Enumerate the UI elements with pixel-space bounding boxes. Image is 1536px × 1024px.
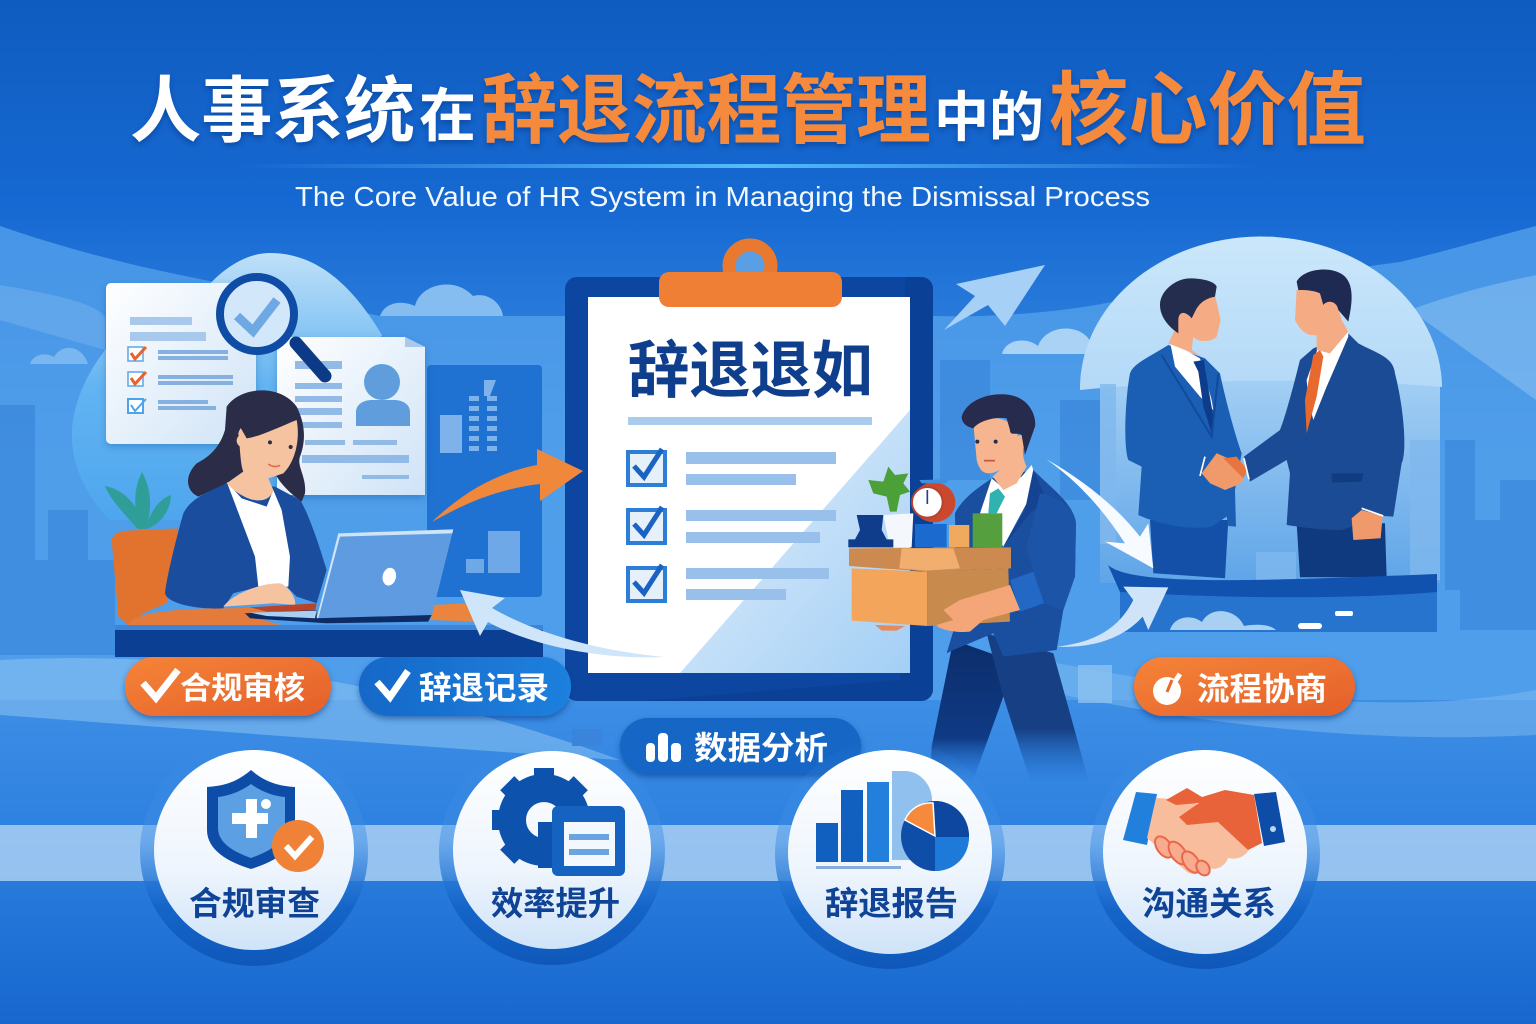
icon: bar and pie chart xyxy=(816,771,969,871)
clip xyxy=(659,245,842,307)
card: dismissal analysis: 辞退报告 xyxy=(825,885,958,922)
jacket xyxy=(947,470,1076,657)
pill: negotiate: 流程协商 xyxy=(1197,671,1327,707)
dome backdrop xyxy=(1080,236,1442,390)
icon: magnifier xyxy=(220,277,325,376)
desk items xyxy=(430,603,477,622)
legs xyxy=(930,640,1003,780)
right skyline detail xyxy=(1100,384,1440,580)
checklist row 2 xyxy=(628,507,836,543)
alarm clock xyxy=(913,482,955,522)
shirt xyxy=(227,482,290,587)
card: relationship: 沟通关系 xyxy=(1142,885,1276,922)
arrows: curves to handshake xyxy=(1047,459,1168,647)
face xyxy=(227,416,298,500)
ribbon band xyxy=(0,825,1536,881)
laptop xyxy=(245,529,453,623)
pill: record xyxy=(359,657,571,716)
platform xyxy=(1108,565,1437,632)
title: 人事系统 xyxy=(130,72,415,152)
small cloud lower right xyxy=(1170,611,1276,630)
hand xyxy=(223,583,295,607)
man carrying box xyxy=(848,394,1088,780)
pill: compliance: 合规审核 xyxy=(180,671,305,706)
two men shaking hands xyxy=(1125,270,1404,578)
title: 在 xyxy=(419,84,476,149)
pill: analysis xyxy=(620,718,861,774)
clouds xyxy=(30,285,1112,364)
arrow: upward curve xyxy=(1057,587,1168,647)
decorative squares xyxy=(572,665,1112,746)
head xyxy=(973,418,1027,490)
title divider xyxy=(240,164,1260,168)
card: relationship xyxy=(1090,739,1320,969)
title: 核心价值 xyxy=(1049,66,1366,155)
title xyxy=(130,66,1366,155)
left man xyxy=(1125,278,1242,578)
pill: negotiate xyxy=(1134,657,1355,716)
panel: skyline behind laptop xyxy=(427,365,542,597)
box contents xyxy=(915,524,947,547)
pill: analysis: 数据分析 xyxy=(694,730,828,766)
checklist row 1 xyxy=(628,449,836,485)
checklist row 3 xyxy=(628,565,829,601)
back hair xyxy=(188,390,305,502)
icon: gear and folder xyxy=(492,768,625,876)
city skyline xyxy=(0,360,1536,655)
pill: compliance xyxy=(125,657,331,716)
card: compliance review xyxy=(140,738,368,966)
icon: shield xyxy=(207,770,324,872)
arm xyxy=(1027,493,1076,610)
card: dismissal analysis xyxy=(775,739,1005,969)
shirt and tie xyxy=(980,465,1033,547)
blazer xyxy=(165,483,327,609)
paper plane xyxy=(944,265,1045,330)
document: profile xyxy=(277,337,425,495)
panel: right skyline backdrop xyxy=(1100,378,1440,583)
box xyxy=(852,568,927,626)
desk xyxy=(115,625,543,657)
title: 中的 xyxy=(934,88,1044,148)
document: checklist xyxy=(106,283,256,444)
clipboard xyxy=(565,245,933,701)
title: 辞退流程管理 xyxy=(482,69,931,154)
pill: record: 辞退记录 xyxy=(419,670,549,706)
arrow: downward curve xyxy=(1047,459,1153,568)
heading: 辞退退如 xyxy=(628,337,873,406)
card: compliance review: 合规审查 xyxy=(189,885,320,922)
plant xyxy=(868,467,910,512)
left backdrop blob xyxy=(72,253,382,520)
plant xyxy=(105,472,171,529)
icon: handshake xyxy=(1123,788,1285,878)
arrow: orange to clipboard xyxy=(432,449,583,522)
card: efficiency xyxy=(439,739,665,965)
woman at desk xyxy=(112,390,477,625)
subtitle: The Core Value of HR System in Managing the Dismissal Process xyxy=(295,181,1150,212)
card: efficiency: 效率提升 xyxy=(491,885,620,922)
arrow: back to desk xyxy=(460,590,664,657)
handshake xyxy=(1202,453,1247,490)
bangs xyxy=(240,410,297,438)
right man xyxy=(1244,270,1404,577)
chair xyxy=(112,528,178,625)
